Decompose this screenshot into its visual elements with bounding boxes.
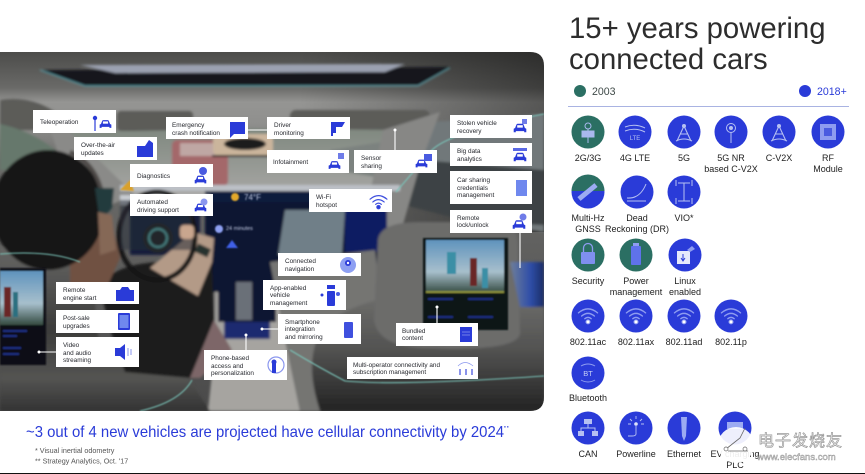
callout: Sensor sharing: Sensor — [361, 155, 382, 162]
technology: Dead Reckoning (DR) — [605, 176, 669, 234]
technology: Power management: Power — [623, 276, 649, 286]
technology: C-V2X: C-V2X — [766, 153, 792, 163]
centre console — [208, 292, 300, 411]
technology: 2G/3G: 2G/3G — [575, 153, 601, 163]
callout: Post-sale upgrades: upgrades — [63, 323, 90, 330]
technology: 802.11ad — [666, 300, 702, 347]
callout: Sensor sharing — [354, 150, 437, 173]
callout: Automated driving support — [130, 194, 213, 216]
callout: Connected navigation: navigation — [285, 266, 315, 273]
callout: Connected navigation: Connected — [285, 258, 316, 265]
callout: App-enabled vehicle management: App-enabled — [270, 285, 307, 292]
callout: Post-sale upgrades: Post-sale — [63, 315, 90, 322]
overhead visors — [0, 99, 430, 132]
technology: Ethernet: Ethernet — [667, 449, 702, 459]
callout: Video and audio streaming: streaming — [63, 357, 92, 364]
dash weather readout: 74°F — [244, 193, 261, 202]
title — [569, 12, 826, 76]
technology: 802.11ax — [618, 300, 655, 347]
technology: 802.11ax: 802.11ax — [618, 337, 655, 347]
rear side window — [425, 114, 544, 232]
callout: Emergency crash notification: Emergency — [172, 122, 205, 129]
driver seat — [0, 247, 210, 411]
technology: Dead Reckoning (DR): Dead — [626, 213, 648, 223]
technology: CAN — [572, 412, 604, 459]
technology: CAN: CAN — [578, 449, 598, 459]
callout: Post-sale upgrades — [56, 310, 139, 333]
callout: Big data analytics: analytics — [457, 156, 482, 163]
technology: RF Module — [812, 116, 844, 174]
technology: 5G — [668, 116, 700, 163]
right seatback screen — [423, 238, 508, 330]
technology: Ethernet — [667, 412, 702, 459]
bottom border — [0, 473, 865, 474]
callout: Bundled content — [396, 323, 478, 346]
legend: 2018+ — [799, 85, 847, 98]
callout: Car sharing credentials management: Car sharing — [457, 177, 490, 184]
callout: Driver monitoring: Driver — [274, 122, 292, 129]
watermark: elecfans logo — [718, 427, 843, 463]
callout: Wi-Fi hotspot: hotspot — [316, 202, 337, 209]
technology: Multi-Hz GNSS: GNSS — [575, 224, 601, 234]
connector lines — [38, 128, 520, 354]
footnotes — [35, 446, 128, 466]
callout: Multi-operator connectivity and subscription management: subscription management — [353, 369, 426, 376]
callout: Video and audio streaming: Video — [63, 342, 80, 349]
steering wheel — [119, 192, 195, 280]
callout: Remote engine start: engine start — [63, 295, 97, 302]
callout: Stolen vehicle recovery: Stolen vehicle — [457, 120, 497, 127]
callout: Smartphone integration and mirroring: integration — [285, 326, 315, 333]
technology: Powerline — [616, 412, 656, 459]
arm and shirt — [100, 262, 214, 378]
callout: Remote lock/unlock: Remote — [457, 215, 480, 222]
panel: car interior photo — [0, 52, 544, 411]
left seatback screen — [0, 268, 46, 365]
legend: 2003 — [574, 85, 616, 98]
technology: RF Module: Module — [813, 164, 843, 174]
callout: Over-the-air updates — [74, 137, 157, 160]
technology: Bluetooth: BT — [583, 369, 593, 378]
callout: Diagnostics — [130, 164, 213, 187]
callout: Emergency crash notification: crash notification — [172, 130, 220, 137]
technology: RF Module: RF — [822, 153, 834, 163]
technology: 802.11ad: 802.11ad — [666, 337, 702, 347]
technology: Powerline: Powerline — [616, 449, 656, 459]
technology: VIO*: VIO* — [674, 213, 694, 223]
callout: Infotainment — [267, 150, 349, 173]
callout: App-enabled vehicle management: management — [270, 300, 308, 307]
watermark: elecfans logo: www.elecfans.com — [756, 452, 836, 463]
callout: Video and audio streaming: and audio — [63, 350, 92, 357]
technology: Power management — [610, 238, 663, 297]
callout: Smartphone integration and mirroring — [278, 314, 361, 344]
teal accent lines — [0, 114, 544, 411]
technology: 5G NR based C-V2X — [704, 116, 758, 174]
callout: Emergency crash notification — [166, 117, 248, 139]
title: connected cars — [569, 43, 768, 76]
technology: Linux enabled: enabled — [669, 287, 701, 297]
callout: Phone-based access and personalization — [204, 350, 287, 380]
callout: Remote engine start: Remote — [63, 287, 86, 294]
callout: Over-the-air updates: updates — [81, 150, 104, 157]
callout: Automated driving support: driving support — [137, 207, 179, 214]
technology: Linux enabled — [668, 238, 702, 297]
callout: Smartphone integration and mirroring: and mirroring — [285, 334, 323, 341]
technology: 5G NR based C-V2X: 5G NR — [717, 153, 745, 163]
technology: 5G NR based C-V2X: based C-V2X — [704, 164, 758, 174]
rear seat back right — [312, 300, 544, 411]
technology: 4G LTE — [618, 116, 652, 163]
callout: Driver monitoring: monitoring — [274, 130, 304, 137]
callout: Wi-Fi hotspot — [309, 189, 392, 212]
callout: Car sharing credentials management — [450, 171, 532, 204]
technology: 2G/3G — [572, 116, 604, 163]
neck and head — [69, 236, 122, 282]
watermark: elecfans logo: 电子发烧友 — [758, 432, 843, 450]
callout: Phone-based access and personalization: Phone-based — [211, 355, 249, 362]
technology: C-V2X — [762, 116, 796, 163]
callout: Infotainment: Infotainment — [273, 159, 308, 166]
technology: 802.11p — [714, 300, 748, 347]
callout: Big data analytics: Big data — [457, 148, 481, 155]
technology: Linux enabled: Linux — [674, 276, 696, 286]
technology: 802.11p: 802.11p — [715, 337, 747, 347]
technology: 802.11ac — [570, 300, 607, 347]
B pillar — [372, 112, 440, 228]
legend: 2018+: 2018+ — [817, 86, 847, 98]
technology: Power management: management — [610, 287, 663, 297]
technology: VIO* — [668, 176, 700, 223]
callout: App-enabled vehicle management — [263, 280, 346, 310]
callout: Driver monitoring — [267, 117, 350, 139]
sunroof — [40, 64, 450, 86]
dashboard and displays — [120, 185, 400, 292]
technology: 4G LTE: 4G LTE — [620, 153, 650, 163]
technology: EV charging PLC: EV charging — [710, 449, 760, 459]
dash weather readout — [215, 193, 261, 248]
callout: Stolen vehicle recovery: recovery — [457, 128, 482, 135]
callout: Sensor sharing: sharing — [361, 163, 382, 170]
callout: Bundled content: Bundled — [402, 328, 426, 335]
technology: Security: Security — [572, 276, 605, 286]
technology: Multi-Hz GNSS — [572, 174, 605, 234]
callout: Car sharing credentials management: management — [457, 192, 495, 199]
windshield view — [0, 124, 400, 196]
callout: Phone-based access and personalization: access and — [211, 363, 244, 370]
callout: Multi-operator connectivity and subscription management — [347, 357, 478, 379]
callout: Big data analytics — [450, 143, 532, 166]
callout: Phone-based access and personalization: personalization — [211, 370, 254, 377]
callout: Video and audio streaming — [56, 337, 139, 367]
driver side A-pillar — [54, 136, 134, 206]
yellow dash hazard light — [120, 180, 134, 191]
callout: Remote engine start — [56, 282, 139, 304]
technology: Dead Reckoning (DR): Reckoning (DR) — [605, 224, 669, 234]
technology: 802.11ac: 802.11ac — [570, 337, 607, 347]
callout: Over-the-air updates: Over-the-air — [81, 142, 116, 149]
callout: Remote lock/unlock — [450, 210, 532, 233]
callout: App-enabled vehicle management: vehicle — [270, 292, 290, 299]
callout: Diagnostics: Diagnostics — [137, 173, 170, 180]
callout: Stolen vehicle recovery — [450, 115, 532, 138]
callout: Automated driving support: Automated — [137, 199, 168, 206]
callout: Teleoperation: Teleoperation — [40, 119, 79, 126]
callout: Car sharing credentials management: credentials — [457, 185, 488, 192]
technology: Multi-Hz GNSS: Multi-Hz — [572, 213, 605, 223]
technology: 4G LTE: LTE — [630, 136, 640, 142]
dash weather readout: 24 minutes — [226, 226, 253, 232]
callout: Wi-Fi hotspot: Wi-Fi — [316, 194, 331, 201]
technology: Security — [572, 238, 605, 286]
legend: 2003: 2003 — [592, 86, 616, 98]
callout: Teleoperation — [33, 110, 116, 133]
front passenger seat — [268, 248, 378, 411]
headline: projected cellular connectivity: ~3 out of 4 new vehicles are projected have cellular connectivity by 2024¨ — [26, 424, 509, 441]
callout: Connected navigation — [278, 253, 361, 276]
footnotes: * Visual inertial odometry — [35, 446, 115, 455]
title: 15+ years powering — [569, 12, 826, 45]
technology: EV charging PLC — [710, 412, 760, 470]
callout: Multi-operator connectivity and subscription management: Multi-operator connectivity and — [353, 362, 440, 369]
technology: Bluetooth — [569, 356, 607, 403]
footnotes: ** Strategy Analytics, Oct. '17 — [35, 456, 128, 466]
callout: Bundled content: content — [402, 335, 423, 342]
callout: Smartphone integration and mirroring: Smartphone — [285, 319, 320, 326]
technology: Bluetooth: Bluetooth — [569, 393, 607, 403]
callout: Remote lock/unlock: lock/unlock — [457, 222, 489, 229]
technology: 5G: 5G — [678, 153, 690, 163]
rear view mirror — [212, 134, 274, 157]
technology: EV charging PLC: PLC — [726, 460, 744, 470]
